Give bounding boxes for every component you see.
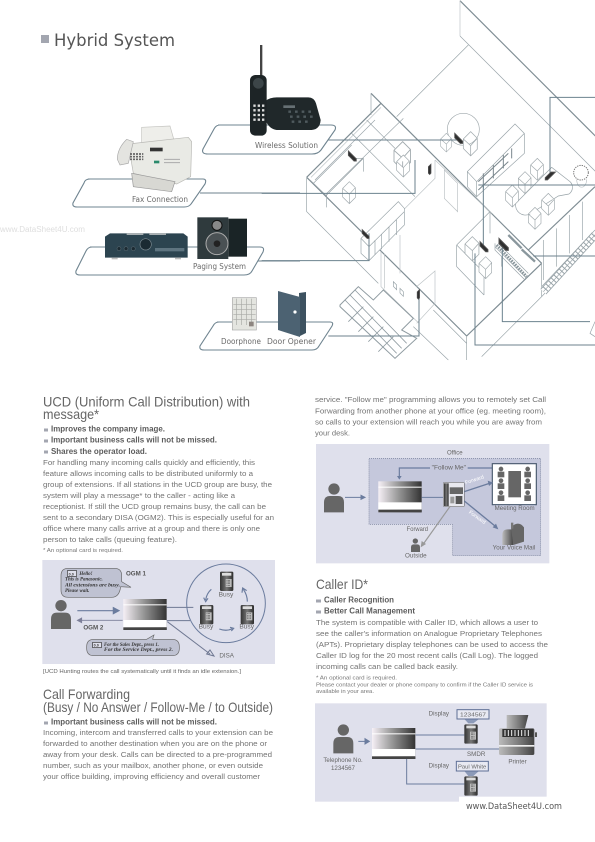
label: telephone number: Telephone No.: [323, 757, 363, 764]
callout: OGM 2 message: [87, 635, 179, 656]
callout: OGM 2 message: 0.0: [94, 644, 99, 648]
Caller ID body text: The system is compatible with Caller ID, which allows a user to: [316, 618, 538, 627]
icon: desk phone: [443, 482, 464, 507]
right column continuation text: your desk.: [315, 428, 350, 438]
arrow: forward outside: [407, 506, 450, 547]
Call Forwarding body text: [43, 728, 273, 781]
meeting room: [492, 464, 536, 512]
UCD body text: office where many calls arrive at a group and there is only one: [43, 524, 260, 533]
Caller ID body text: incoming calls can be called back easily.: [316, 662, 458, 671]
Caller ID footnotes: * An optional card is required.: [316, 676, 397, 682]
PBX unit: [123, 599, 167, 630]
arrow: forward to meeting room: Forward: [464, 474, 485, 486]
callout: OGM 1 message: All extensions are busy.: [64, 583, 120, 588]
section: UCD heading: UCD (Uniform Call Distribution) with: [43, 394, 250, 410]
Caller ID footnotes: Please contact your dealer or phone company to confirm if the Caller ID service is: [316, 682, 533, 688]
UCD body text: For handling many incoming calls quickly and efficiently, this: [43, 458, 255, 467]
long conference table: [516, 167, 572, 215]
connection lines: [262, 97, 595, 345]
icon: caller: [333, 724, 353, 753]
Call Forwarding body text: forwarded to another destination when you are on the phone or: [43, 739, 267, 748]
callout: OGM 1 message: Please wait.: [65, 589, 89, 594]
arrow: forward outside: Forward: [407, 526, 428, 533]
label plate: doorphone and door opener: [200, 291, 333, 350]
icon: printer: [499, 715, 537, 766]
label plate: doorphone and door opener: Doorphone: [221, 337, 261, 346]
icon: display phone 1: [464, 724, 478, 744]
watermark bottom: www.DataSheet4U.com: [466, 801, 562, 811]
Call Forwarding body text: Incoming, intercom and transferred calls to your extension can be: [43, 728, 273, 737]
icon: voice mail: [493, 523, 535, 552]
icon: cordless phone: [250, 45, 321, 136]
UCD bullet list: [44, 424, 217, 456]
extension group ring: Busy: [239, 624, 255, 631]
Call Forwarding body text: number, such as your mailbox, another phone, or even outside: [43, 761, 263, 770]
right column continuation text: Forwarding from another phone at your office (eg. meeting room),: [315, 406, 546, 416]
section: Call Forwarding heading: (Busy / No Answer / Follow-Me / to Outside): [43, 699, 273, 715]
Caller ID bullets: Better Call Management: [324, 606, 415, 616]
display callout: number: 1234567: [460, 712, 486, 718]
connection lines: [407, 735, 499, 784]
display callout: name: [429, 761, 488, 776]
label plate: wireless solution: Wireless Solution: [255, 141, 318, 150]
Call Forwarding body text: away from your desk. Calls can be directed to a pre-programmed: [43, 750, 272, 759]
display callout: name: Display: [429, 763, 450, 770]
panel: UCD diagram: [42, 560, 275, 664]
right column continuation text: so calls to your extension will reach you while you are away from: [315, 418, 542, 426]
UCD body text: receptionist. If still the UCD group remains busy, the call can be: [43, 502, 266, 511]
icon: fax machine: [117, 126, 192, 192]
label plate: doorphone and door opener: Door Opener: [267, 337, 317, 346]
Caller ID body text: Caller ID log for the 20 most recent calls (Call Log). The logged: [316, 651, 538, 660]
stairs: [340, 287, 417, 358]
callout: OGM 1 message: 0.0: [69, 572, 74, 576]
display callout: name: Paul White: [458, 764, 486, 770]
label plate: fax connection: Fax Connection: [132, 195, 188, 204]
bookcase: [467, 124, 524, 197]
icon: printer: Printer: [508, 759, 527, 766]
title: Hybrid System: Hybrid System: [54, 31, 175, 50]
icon: display phone 2: [464, 776, 478, 796]
plant: [574, 165, 588, 187]
callout: OGM 2 message: For the Sales Dept., press 1.: [104, 643, 159, 648]
UCD footnote: * An optional card is required.: [43, 548, 123, 554]
round meeting table: [447, 113, 479, 145]
PBX unit: [378, 481, 422, 512]
section: Call Forwarding heading: Call Forwarding: [43, 686, 130, 702]
label plate: wireless solution: [203, 45, 336, 154]
label: DISA: DISA: [219, 652, 235, 659]
label: telephone number: 1234567: [331, 765, 355, 772]
label: SMDR: SMDR: [467, 751, 486, 758]
link PBX to phone: [422, 496, 443, 499]
arrow: incoming call: [77, 608, 119, 614]
section: Call Forwarding heading: [43, 686, 273, 715]
isometric office floor plan: [262, 1, 595, 360]
icon: caller: [324, 483, 344, 512]
UCD body text: group of extensions. If all stations in the UCD group are busy, the: [43, 480, 272, 489]
icon: door opener: [278, 291, 306, 337]
label: OGM 2: OGM 2: [83, 626, 104, 632]
handset markers: [348, 133, 555, 299]
Caller ID bullets: [316, 595, 415, 616]
Caller ID footnotes: [316, 676, 533, 695]
UCD body text: feature allows incoming calls to be distributed uniformly to a: [43, 469, 254, 478]
lower room: [457, 212, 535, 295]
icon: doorphone: [232, 298, 256, 330]
UCD bullet list: Shares the operator load.: [51, 446, 147, 456]
icon: voice mail: Your Voice Mail: [493, 545, 535, 552]
display callout: number: Display: [429, 711, 450, 718]
Caller ID body text: [316, 618, 548, 671]
label: OGM 1: OGM 1: [126, 572, 147, 578]
arrow: OGM to caller: [77, 618, 123, 623]
UCD body text: person to take calls (queuing feature).: [43, 535, 177, 544]
extension group ring: Busy: [219, 591, 234, 598]
Call Forwarding body text: your office building, improving efficiency and overall customer: [43, 772, 260, 781]
arrow: call in: [345, 495, 365, 499]
label plate: fax connection: [73, 126, 300, 207]
callout: OGM 2 message: For the Service Dept., press 2.: [104, 648, 173, 653]
extension group ring: Busy: [199, 624, 214, 631]
white page corner: [459, 797, 549, 804]
watermark left: www.DataSheet4U.com: [0, 225, 85, 234]
UCD diagram caption: [UCD Hunting routes the call systematically until it finds an idle extension.]: [43, 669, 241, 675]
Caller ID body text: (APTs). Proprietary display telephones can be used to access the: [316, 640, 548, 649]
Call Forwarding bullet: Important business calls will not be missed.: [51, 717, 217, 727]
callout: OGM 1 message: Hello!: [78, 572, 93, 577]
UCD bullet list: Important business calls will not be missed.: [51, 435, 217, 445]
arrow: forward to voice mail: [464, 501, 498, 529]
office zone: [369, 458, 541, 556]
Follow Me path: [397, 465, 492, 480]
callout: OGM 1 message: [61, 568, 131, 597]
UCD body text: sent to a secondary DISA (OGM2). This is especially useful for an: [43, 513, 274, 522]
Caller ID bullets: Caller Recognition: [324, 595, 394, 605]
connection lines to group and DISA: [167, 607, 214, 656]
section: Caller ID heading: Caller ID*: [316, 576, 368, 592]
meeting room: Meeting Room: [495, 505, 535, 512]
right column continuation text: [315, 395, 546, 438]
panel: Caller ID diagram: [315, 703, 549, 804]
Caller ID body text: see the caller's information on Analogue Proprietary Telephones: [316, 629, 542, 638]
icon: caller: [51, 600, 71, 629]
UCD body text: system will play a message* to the caller - acting like a: [43, 491, 236, 500]
label: Outside: [405, 538, 427, 560]
connector from paging plate: [258, 260, 300, 262]
PBX unit: [372, 728, 415, 759]
label plate: paging system: [76, 217, 300, 275]
section: UCD heading: [43, 394, 250, 422]
Follow Me path: "Follow Me": [432, 465, 466, 472]
right column continuation text: service. "Follow me" programming allows you to remotely set Call: [315, 395, 546, 404]
arrow: forward to voice mail: Forward: [467, 510, 487, 526]
callout: OGM 1 message: This is Panasonic.: [65, 578, 103, 583]
icon: amplifier and speakers: [105, 217, 247, 259]
label: Outside: Outside: [405, 553, 427, 560]
connector from fax plate: [200, 192, 300, 194]
label: Office: Office: [447, 449, 463, 456]
panel: Follow Me diagram: [316, 444, 549, 563]
Caller ID footnotes: available in your area.: [316, 689, 374, 695]
exterior balcony: [543, 202, 595, 292]
display callout: number: [429, 710, 489, 723]
arrow: forward to meeting room: [464, 474, 493, 492]
UCD body text: [43, 458, 274, 544]
arrow: incoming call: [358, 739, 369, 744]
section: UCD heading: message*: [43, 406, 99, 422]
UCD bullet list: Improves the company image.: [51, 424, 165, 434]
label: telephone number: [323, 757, 363, 772]
wall with windows: [361, 202, 404, 261]
label plate: paging system: Paging System: [193, 262, 246, 271]
extension group ring: [187, 564, 265, 643]
